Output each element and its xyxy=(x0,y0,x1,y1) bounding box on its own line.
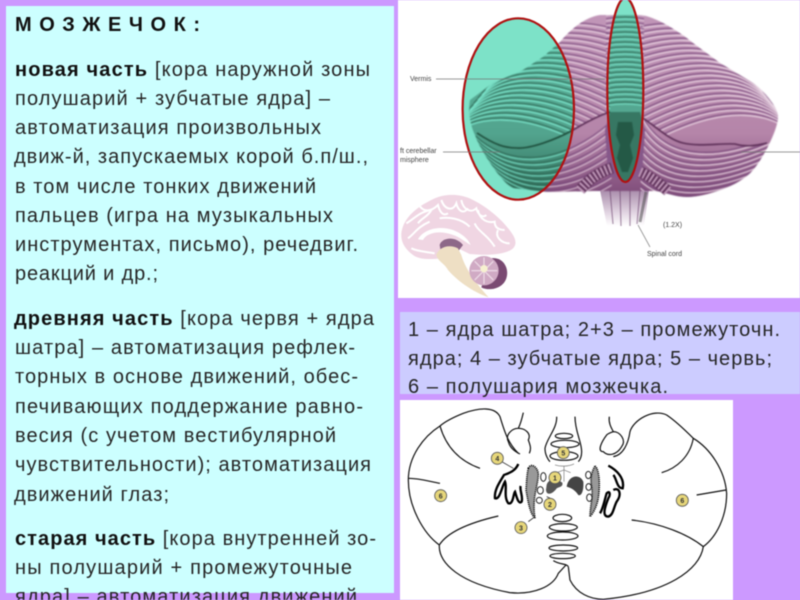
text block: ancient part: весия (с учетом вестибулярной xyxy=(15,425,336,447)
text block: ancient part: печивающих поддержание равно- xyxy=(15,396,363,418)
panel: legend: ядра; 4 – зубчатые ядра; 5 – червь; xyxy=(408,348,772,370)
emboliform and fastigial nuclei xyxy=(526,466,599,518)
text block: new part: пальцев (игра на музыкальных xyxy=(15,205,333,227)
panel: legend xyxy=(400,312,800,398)
panel: legend: 1 – ядра шатра; 2+3 – промежуточн. xyxy=(408,319,780,341)
text block: ancient part: торных в основе движений, обес- xyxy=(15,366,358,388)
lower vermis folia xyxy=(547,514,578,567)
anatomical labels: (1.2X) xyxy=(663,222,682,229)
cerebellum, posterior view xyxy=(442,12,800,220)
panel: cerebellum illustration xyxy=(398,0,800,298)
icon: small brain section xyxy=(401,195,515,297)
number markers: 3 xyxy=(519,525,523,532)
anatomical labels xyxy=(400,76,800,258)
anatomical labels: Vermis xyxy=(410,76,432,83)
spinal cord xyxy=(600,190,649,226)
anatomical labels: Spinal cord xyxy=(647,251,682,258)
number markers: 2 xyxy=(548,502,552,509)
text block: old part: старая часть [кора внутренней зо- xyxy=(15,528,376,550)
text block: new part: полушарий + зубчатые ядра] – xyxy=(15,88,331,110)
cerebellum outline xyxy=(408,409,727,599)
number markers: 1 xyxy=(553,475,557,482)
text block: new part xyxy=(14,59,370,285)
text block: ancient part: чувствительности); автоматизация xyxy=(15,454,371,476)
text block: new part: реакций и др.; xyxy=(15,263,158,285)
text block: new part: инструментах, письмо), речедвиг. xyxy=(15,234,358,256)
number markers: 6 xyxy=(439,493,443,500)
dentate nuclei xyxy=(495,464,623,517)
panel: cerebellum nuclei diagram xyxy=(400,400,733,600)
panel: main text xyxy=(6,6,394,600)
number markers: 4 xyxy=(495,456,499,463)
text block: ancient part xyxy=(14,308,375,506)
anatomical labels: misphere xyxy=(400,157,429,164)
text block: new part: в том числе тонких движений xyxy=(15,176,316,198)
number markers xyxy=(435,447,688,534)
text block: new part: движ-й, запускаемых корой б.п/ш., xyxy=(14,146,368,168)
text block: new part: автоматизация произвольных xyxy=(15,117,321,139)
panel: legend: 6 – полушария мозжечка. xyxy=(408,376,668,398)
number markers: 6 xyxy=(680,498,684,505)
text block: ancient part: шатра] – автоматизация рефлек- xyxy=(15,337,355,359)
anatomical labels: ft cerebellar xyxy=(400,148,437,155)
text block: ancient part: древняя часть [кора червя + ядра xyxy=(14,308,375,330)
title: М О З Ж Е Ч О К : xyxy=(15,14,200,36)
text block: ancient part: движений глаз; xyxy=(14,484,169,506)
text block: old part xyxy=(15,528,376,600)
text block: new part: новая часть [кора наружной зоны xyxy=(15,59,370,81)
number markers: 5 xyxy=(561,450,565,457)
highlighted hemisphere and vermis xyxy=(460,0,646,202)
text block: old part: ны полушарий + промежуточные xyxy=(15,557,352,579)
